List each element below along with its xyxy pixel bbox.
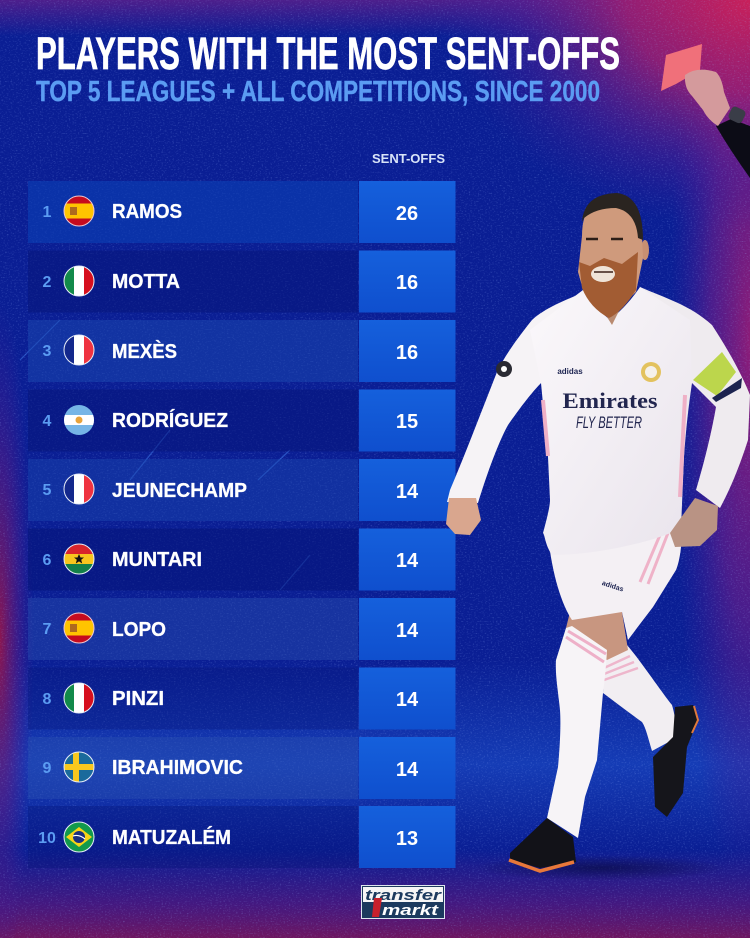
shirt slogan: FLY BETTER bbox=[576, 413, 642, 432]
referee watch bbox=[727, 105, 747, 124]
row 1: Ramos: 26 bbox=[396, 203, 418, 225]
referee sleeve bbox=[716, 119, 750, 178]
head bbox=[578, 196, 643, 314]
row 10: Matuzalém: 10 bbox=[38, 830, 56, 847]
row 2: Motta bbox=[28, 250, 456, 312]
icon: red card bbox=[661, 44, 702, 91]
row 2: Motta: 2 bbox=[43, 274, 52, 291]
shirt sponsor: Emirates bbox=[562, 388, 658, 413]
row 8: Pinzi bbox=[28, 668, 456, 730]
referee hand bbox=[685, 70, 730, 126]
row 8: Pinzi: PINZI bbox=[112, 688, 164, 710]
neck bbox=[590, 285, 632, 325]
row 5: Jeunechamp: 14 bbox=[396, 481, 419, 503]
row 3: Mexès: MEXÈS bbox=[112, 340, 177, 363]
column header: SENT-OFFS bbox=[372, 151, 445, 166]
diagonal streaks bbox=[20, 320, 310, 590]
right arm bbox=[640, 287, 750, 508]
Champions League patch bbox=[496, 361, 512, 377]
rear boot bbox=[653, 705, 698, 817]
row 6: Muntari: 14 bbox=[396, 550, 419, 572]
left hand bbox=[446, 498, 481, 535]
Real Madrid crest bbox=[641, 362, 661, 382]
row 6: Muntari bbox=[28, 528, 456, 590]
row 9: Ibrahimovic: IBRAHIMOVIC bbox=[112, 757, 243, 779]
row 5: Jeunechamp bbox=[28, 459, 456, 521]
mouth bbox=[591, 266, 615, 282]
Transfermarkt logo bbox=[362, 886, 444, 919]
row 2: Motta: 16 bbox=[396, 272, 418, 294]
armband bbox=[693, 352, 736, 396]
row 7: Lopo: LOPO bbox=[112, 619, 166, 641]
rear leg sock bbox=[603, 645, 676, 751]
adidas logo: adidas bbox=[557, 367, 583, 376]
row 8: Pinzi: 8 bbox=[43, 691, 52, 708]
shorts bbox=[548, 525, 682, 640]
player photo illustration: Sergio Ramos: adidas bbox=[601, 580, 624, 594]
row 1: Ramos: RAMOS bbox=[112, 201, 182, 223]
subtitle: TOP 5 LEAGUES + ALL COMPETITIONS, SINCE 2000 bbox=[36, 76, 600, 108]
front boot bbox=[510, 818, 576, 868]
row 5: Jeunechamp: 5 bbox=[43, 482, 52, 499]
row 4: Rodríguez bbox=[28, 390, 456, 452]
right hand bbox=[670, 498, 718, 547]
beard bbox=[579, 252, 638, 318]
row 3: Mexès: 3 bbox=[43, 343, 52, 360]
row 9: Ibrahimovic bbox=[28, 737, 456, 799]
front leg thigh bbox=[565, 612, 628, 660]
row 4: Rodríguez: 4 bbox=[43, 413, 52, 430]
row 4: Rodríguez: 15 bbox=[396, 411, 418, 433]
row 4: Rodríguez: RODRÍGUEZ bbox=[112, 409, 228, 432]
row 10: Matuzalém bbox=[28, 806, 456, 868]
left arm bbox=[447, 292, 585, 503]
hair bbox=[582, 193, 643, 240]
row 5: Jeunechamp: JEUNECHAMP bbox=[112, 480, 247, 502]
jersey torso bbox=[530, 287, 692, 555]
row 7: Lopo: 14 bbox=[396, 620, 419, 642]
row 7: Lopo: 7 bbox=[43, 621, 52, 638]
row 3: Mexès: 16 bbox=[396, 342, 418, 364]
ear bbox=[641, 240, 649, 260]
row 6: Muntari: 6 bbox=[43, 552, 52, 569]
Transfermarkt logo: transfer bbox=[365, 887, 443, 904]
eyes bbox=[586, 238, 623, 240]
front leg sock bbox=[547, 626, 607, 838]
row 10: Matuzalém: 13 bbox=[396, 828, 418, 850]
row 1: Ramos: 1 bbox=[43, 204, 52, 221]
row 3: Mexès bbox=[28, 320, 456, 382]
Transfermarkt logo: markt bbox=[382, 902, 439, 919]
ranking table bbox=[28, 181, 456, 868]
row 6: Muntari: MUNTARI bbox=[112, 549, 202, 571]
row 9: Ibrahimovic: 14 bbox=[396, 759, 419, 781]
row 7: Lopo bbox=[28, 598, 456, 660]
row 2: Motta: MOTTA bbox=[112, 271, 180, 293]
row 9: Ibrahimovic: 9 bbox=[43, 760, 52, 777]
referee hand with red card bbox=[661, 44, 750, 178]
row 8: Pinzi: 14 bbox=[396, 689, 419, 711]
player photo illustration: Sergio Ramos bbox=[446, 193, 750, 881]
row 10: Matuzalém: MATUZALÉM bbox=[112, 826, 231, 849]
row 1: Ramos bbox=[28, 181, 456, 243]
